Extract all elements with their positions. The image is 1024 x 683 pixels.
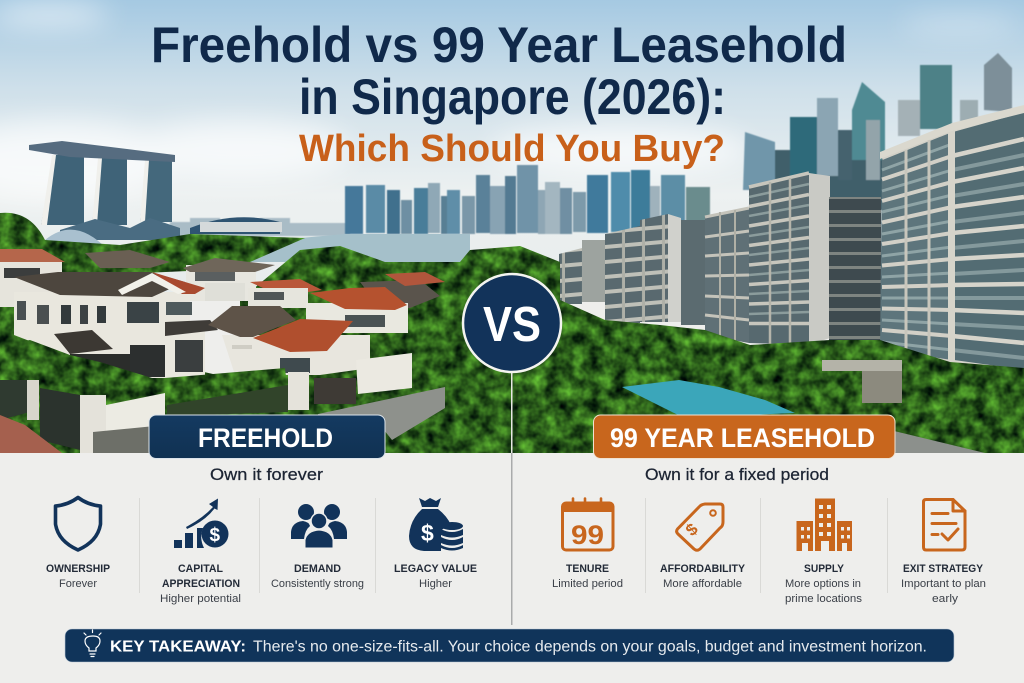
lower information panel background [0,453,1024,683]
demand label: DEMAND [294,563,341,575]
legacy label: LEGACY VALUE [394,563,477,575]
condo: mid-left block [605,214,708,325]
background dark-roof houses [85,250,445,308]
key takeaway text: There's no one-size-fits-all. Your choice depends on your goals, budget and investment horizon. [253,638,927,656]
sky [0,0,1024,300]
large white villa [14,272,218,378]
leasehold header pill [594,415,895,458]
bay water [240,234,470,265]
tenure value: Limited period [552,578,623,590]
front gate and fence [0,380,288,453]
item dividers [139,498,376,593]
demand value: Consistently strong [271,578,364,590]
title [151,17,847,170]
icon: shield [56,498,100,550]
icon: checklist document [924,500,965,550]
distant city skyline [345,165,710,235]
supply label: SUPPLY [804,563,845,575]
red-roof bungalow [208,306,370,375]
condo: far tower face [582,240,606,302]
condo: centre block [705,173,881,345]
supply value line 2: prime locations [785,593,863,605]
item: legacy value [394,498,477,590]
legacy value: Higher [419,578,452,590]
mid red-roof house [306,287,408,333]
affordability value: More affordable [663,578,742,590]
icon: buildings [796,498,852,551]
item: ownership [46,498,110,590]
back skyscrapers [743,53,1012,210]
leasehold header pill: 99 YEAR LEASEHOLD [610,423,875,453]
appreciation label: APPRECIATION [162,578,240,590]
exit strategy value line 2: early [932,593,959,605]
leasehold subtitle: Own it for a fixed period [645,465,829,484]
ownership label: OWNERSHIP [46,563,110,575]
tenure label: TENURE [566,563,609,575]
pool pavilion [822,360,902,403]
top-left house [0,249,65,307]
left foliage [0,280,50,400]
VS badge: VS [483,298,541,352]
exit strategy value line 1: Important to plan [901,578,986,590]
key takeaway bar [65,629,954,662]
key takeaway label: KEY TAKEAWAY: [110,638,246,656]
freehold subtitle: Own it forever [210,465,323,484]
distant haze skyline [170,218,350,236]
panel: freehold [46,415,477,605]
back white house [183,258,322,308]
icon: people group [291,504,347,548]
condo: far tower [559,248,582,304]
affordability label: AFFORDABILITY [660,563,746,575]
title line 3: Which Should You Buy? [299,128,725,170]
swimming pool [622,380,795,416]
VS badge [463,274,561,372]
icon: growth chart with dollar coin: $ [210,525,220,546]
icon: money bag and coins: $ [421,520,434,546]
centre divider line [511,372,512,625]
right road [890,430,985,453]
icon: price tag: $ [682,519,702,540]
title line 1: Freehold vs 99 Year Leasehold [151,17,847,73]
item: affordability [660,504,746,590]
freehold header pill: FREEHOLD [198,423,333,453]
title line 2: in Singapore (2026): [299,69,726,125]
photo scene background [0,0,1024,455]
item dividers [645,498,888,593]
supply value line 1: More options in [785,578,861,590]
item: supply [785,498,863,605]
Marina Bay Sands towers [29,141,175,225]
condo: front block [880,105,1024,372]
street in front of villas [318,387,445,440]
pool terrace planting [690,375,850,412]
icon: calendar 99: 99 [571,520,604,550]
capital label: CAPITAL [178,563,223,575]
white boundary wall [288,353,412,410]
exit strategy label: EXIT STRATEGY [903,563,984,575]
convention halls and dome [45,217,282,250]
icon: light bulb [84,630,101,656]
villa garden bushes [0,340,152,405]
freehold header pill [149,415,385,458]
foliage mass [0,246,1024,455]
ownership value: Forever [59,578,97,590]
item: tenure [552,498,623,590]
clouds [0,5,1020,200]
front lawn bushes [165,368,290,412]
item: capital appreciation [160,498,241,605]
far tree line [0,213,305,275]
panel: leasehold [552,415,986,605]
brick driveway [0,415,62,453]
item: exit strategy [901,500,986,605]
item: demand [271,504,364,590]
appreciation value: Higher potential [160,593,241,605]
